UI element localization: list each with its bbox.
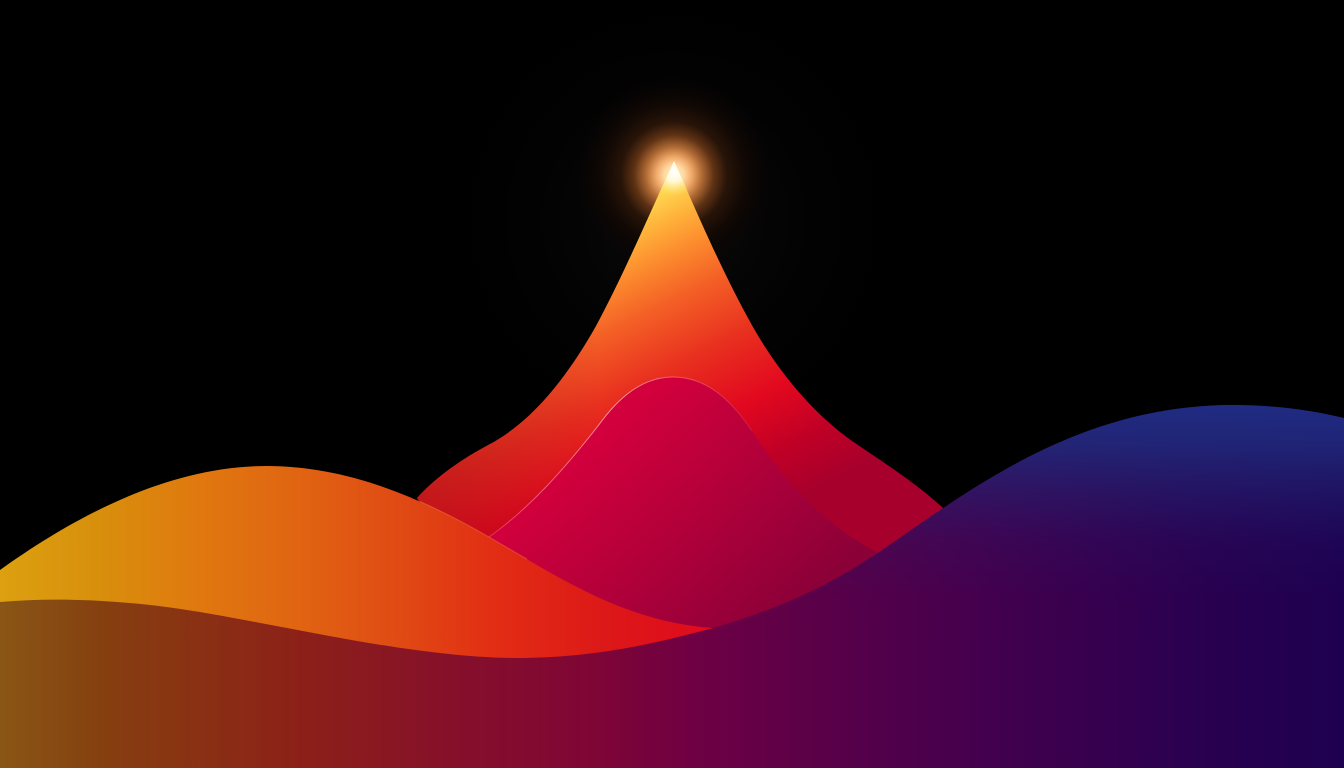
glow halo at summit (574, 75, 774, 275)
central peak (417, 161, 943, 555)
left orange hill (0, 466, 713, 690)
front wave (0, 405, 1344, 768)
inner crimson hill (489, 377, 877, 650)
